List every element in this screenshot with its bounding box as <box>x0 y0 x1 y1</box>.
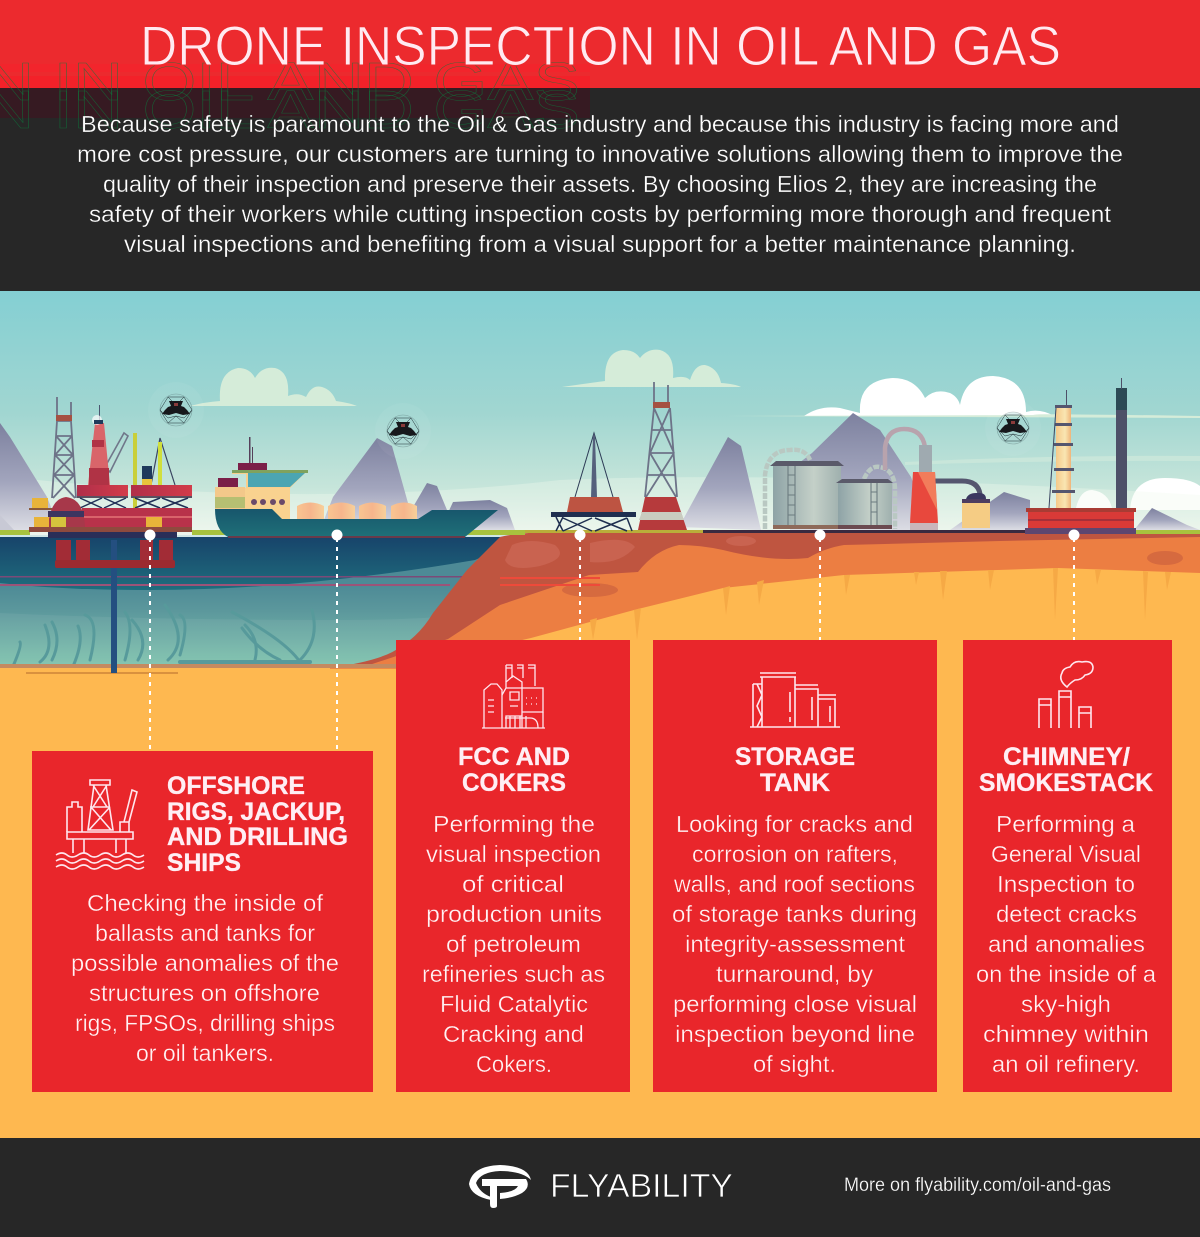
red tower <box>88 423 110 485</box>
drone 1 <box>148 382 204 438</box>
intro band <box>0 88 1200 291</box>
body text: of storage tanks during <box>672 901 917 927</box>
body text: Cokers. <box>476 1051 552 1077</box>
body text: on the inside of a <box>976 961 1156 987</box>
intro paragraph: visual inspections and benefiting from a visual support for a better maintenance planning. <box>124 231 1076 257</box>
pontoon <box>55 560 175 568</box>
body text: sky-high <box>1021 991 1111 1017</box>
panel: chimney <box>963 640 1172 1092</box>
jackup rig and land derrick <box>551 382 687 531</box>
columns <box>56 540 173 560</box>
furnace with pipes <box>885 429 990 530</box>
body text: of petroleum <box>446 931 581 957</box>
crane <box>105 433 128 472</box>
drill pipe <box>111 540 117 673</box>
heading: FCC AND <box>458 743 570 771</box>
body text: or oil tankers. <box>136 1040 274 1066</box>
body text <box>672 811 917 1077</box>
footer link: More on flyability.com/oil-and-gas <box>844 1175 1111 1196</box>
yellow pole <box>133 433 137 508</box>
body text: refineries such as <box>422 961 605 987</box>
seaweed <box>14 605 314 664</box>
body text: ballasts and tanks for <box>95 920 315 946</box>
ground surface <box>0 530 1200 535</box>
sky <box>0 291 1200 536</box>
callout lines and pins <box>144 530 1080 751</box>
footer band <box>0 1138 1200 1237</box>
heading: RIGS, JACKUP, <box>167 798 345 826</box>
lower plate <box>29 527 192 532</box>
body text: Performing a <box>996 811 1135 837</box>
body text: turnaround, by <box>716 961 874 987</box>
icon: offshore rig <box>56 780 144 869</box>
body text: walls, and roof sections <box>673 871 915 897</box>
heading <box>979 743 1153 797</box>
upper decks <box>77 485 128 498</box>
land derrick tower <box>645 382 677 497</box>
horizon haze <box>0 476 1200 530</box>
heading: COKERS <box>462 769 566 797</box>
derrick <box>52 397 76 498</box>
intro paragraph: Because safety is paramount to the Oil & Gas industry and because this industry is facing more and <box>81 111 1119 137</box>
brand name: FLYABILITY <box>550 1167 733 1204</box>
barrels <box>32 498 48 508</box>
body text: integrity-assessment <box>685 931 906 957</box>
body text: Performing the <box>433 811 595 837</box>
body text: and anomalies <box>988 931 1145 957</box>
body text: Checking the inside of <box>87 890 324 916</box>
heading: SHIPS <box>167 849 241 877</box>
intro paragraph: quality of their inspection and preserve their assets. By choosing Elios 2, they are increasing the <box>103 171 1097 197</box>
ghost title artefact <box>0 52 590 140</box>
water <box>0 535 520 668</box>
icon: refinery <box>482 665 545 728</box>
land layers <box>0 532 1200 674</box>
body text: chimney within <box>983 1021 1149 1047</box>
heading: CHIMNEY/ <box>1003 743 1130 771</box>
heading <box>458 743 570 797</box>
heading <box>735 743 855 797</box>
icon: Flyability logo <box>469 1165 531 1208</box>
main deck <box>82 508 192 527</box>
tanker ship <box>215 437 498 538</box>
body text: structures on offshore <box>89 980 320 1006</box>
sand background <box>0 665 1200 1138</box>
icon: storage tanks <box>750 673 840 727</box>
drone 3 <box>985 400 1041 456</box>
body text: Looking for cracks and <box>676 811 913 837</box>
body text: rigs, FPSOs, drilling ships <box>75 1010 335 1036</box>
heading: AND DRILLING <box>167 823 348 851</box>
intro paragraph: safety of their workers while cutting inspection costs by performing more thorough and frequent <box>89 201 1112 227</box>
icon: chimneys with smoke <box>1039 662 1093 728</box>
cargo tanks <box>297 502 417 519</box>
body text: of critical <box>462 871 564 897</box>
body text: visual inspection <box>426 841 601 867</box>
panel: FCC and cokers <box>396 640 630 1092</box>
body text: possible anomalies of the <box>71 950 339 976</box>
body text: Inspection to <box>997 871 1135 897</box>
heading: STORAGE <box>735 743 855 771</box>
intro paragraph <box>77 111 1123 257</box>
body text: Cracking and <box>443 1021 584 1047</box>
body text: corrosion on rafters, <box>692 841 898 867</box>
body text: inspection beyond line <box>675 1021 915 1047</box>
offshore rig <box>29 397 192 673</box>
drone 2 <box>375 403 431 459</box>
body text: General Visual <box>991 841 1141 867</box>
intro paragraph: more cost pressure, our customers are turning to innovative solutions allowing them to improve the <box>77 141 1123 167</box>
header band <box>0 0 1200 88</box>
dome <box>48 497 85 527</box>
storage tanks <box>765 450 895 529</box>
body text <box>422 811 605 1077</box>
heading: SMOKESTACK <box>979 769 1153 797</box>
heading: TANK <box>760 769 830 797</box>
mountains <box>0 413 1200 530</box>
body text: an oil refinery. <box>992 1051 1140 1077</box>
body text: detect cracks <box>996 901 1137 927</box>
body text <box>976 811 1156 1077</box>
body text: performing close visual <box>673 991 917 1017</box>
clouds <box>190 350 1200 510</box>
body text: of sight. <box>753 1051 836 1077</box>
body text <box>71 890 339 1066</box>
refinery chimneys and base <box>1025 378 1136 534</box>
title: DRONE INSPECTION IN OIL AND GAS <box>140 14 1061 77</box>
heading: OFFSHORE <box>167 772 305 800</box>
right crane legs <box>151 438 175 485</box>
body text: production units <box>426 901 602 927</box>
panel: offshore rigs <box>32 751 373 1092</box>
body text: Fluid Catalytic <box>440 991 588 1017</box>
heading <box>167 772 348 877</box>
panel: storage tank <box>653 640 937 1092</box>
